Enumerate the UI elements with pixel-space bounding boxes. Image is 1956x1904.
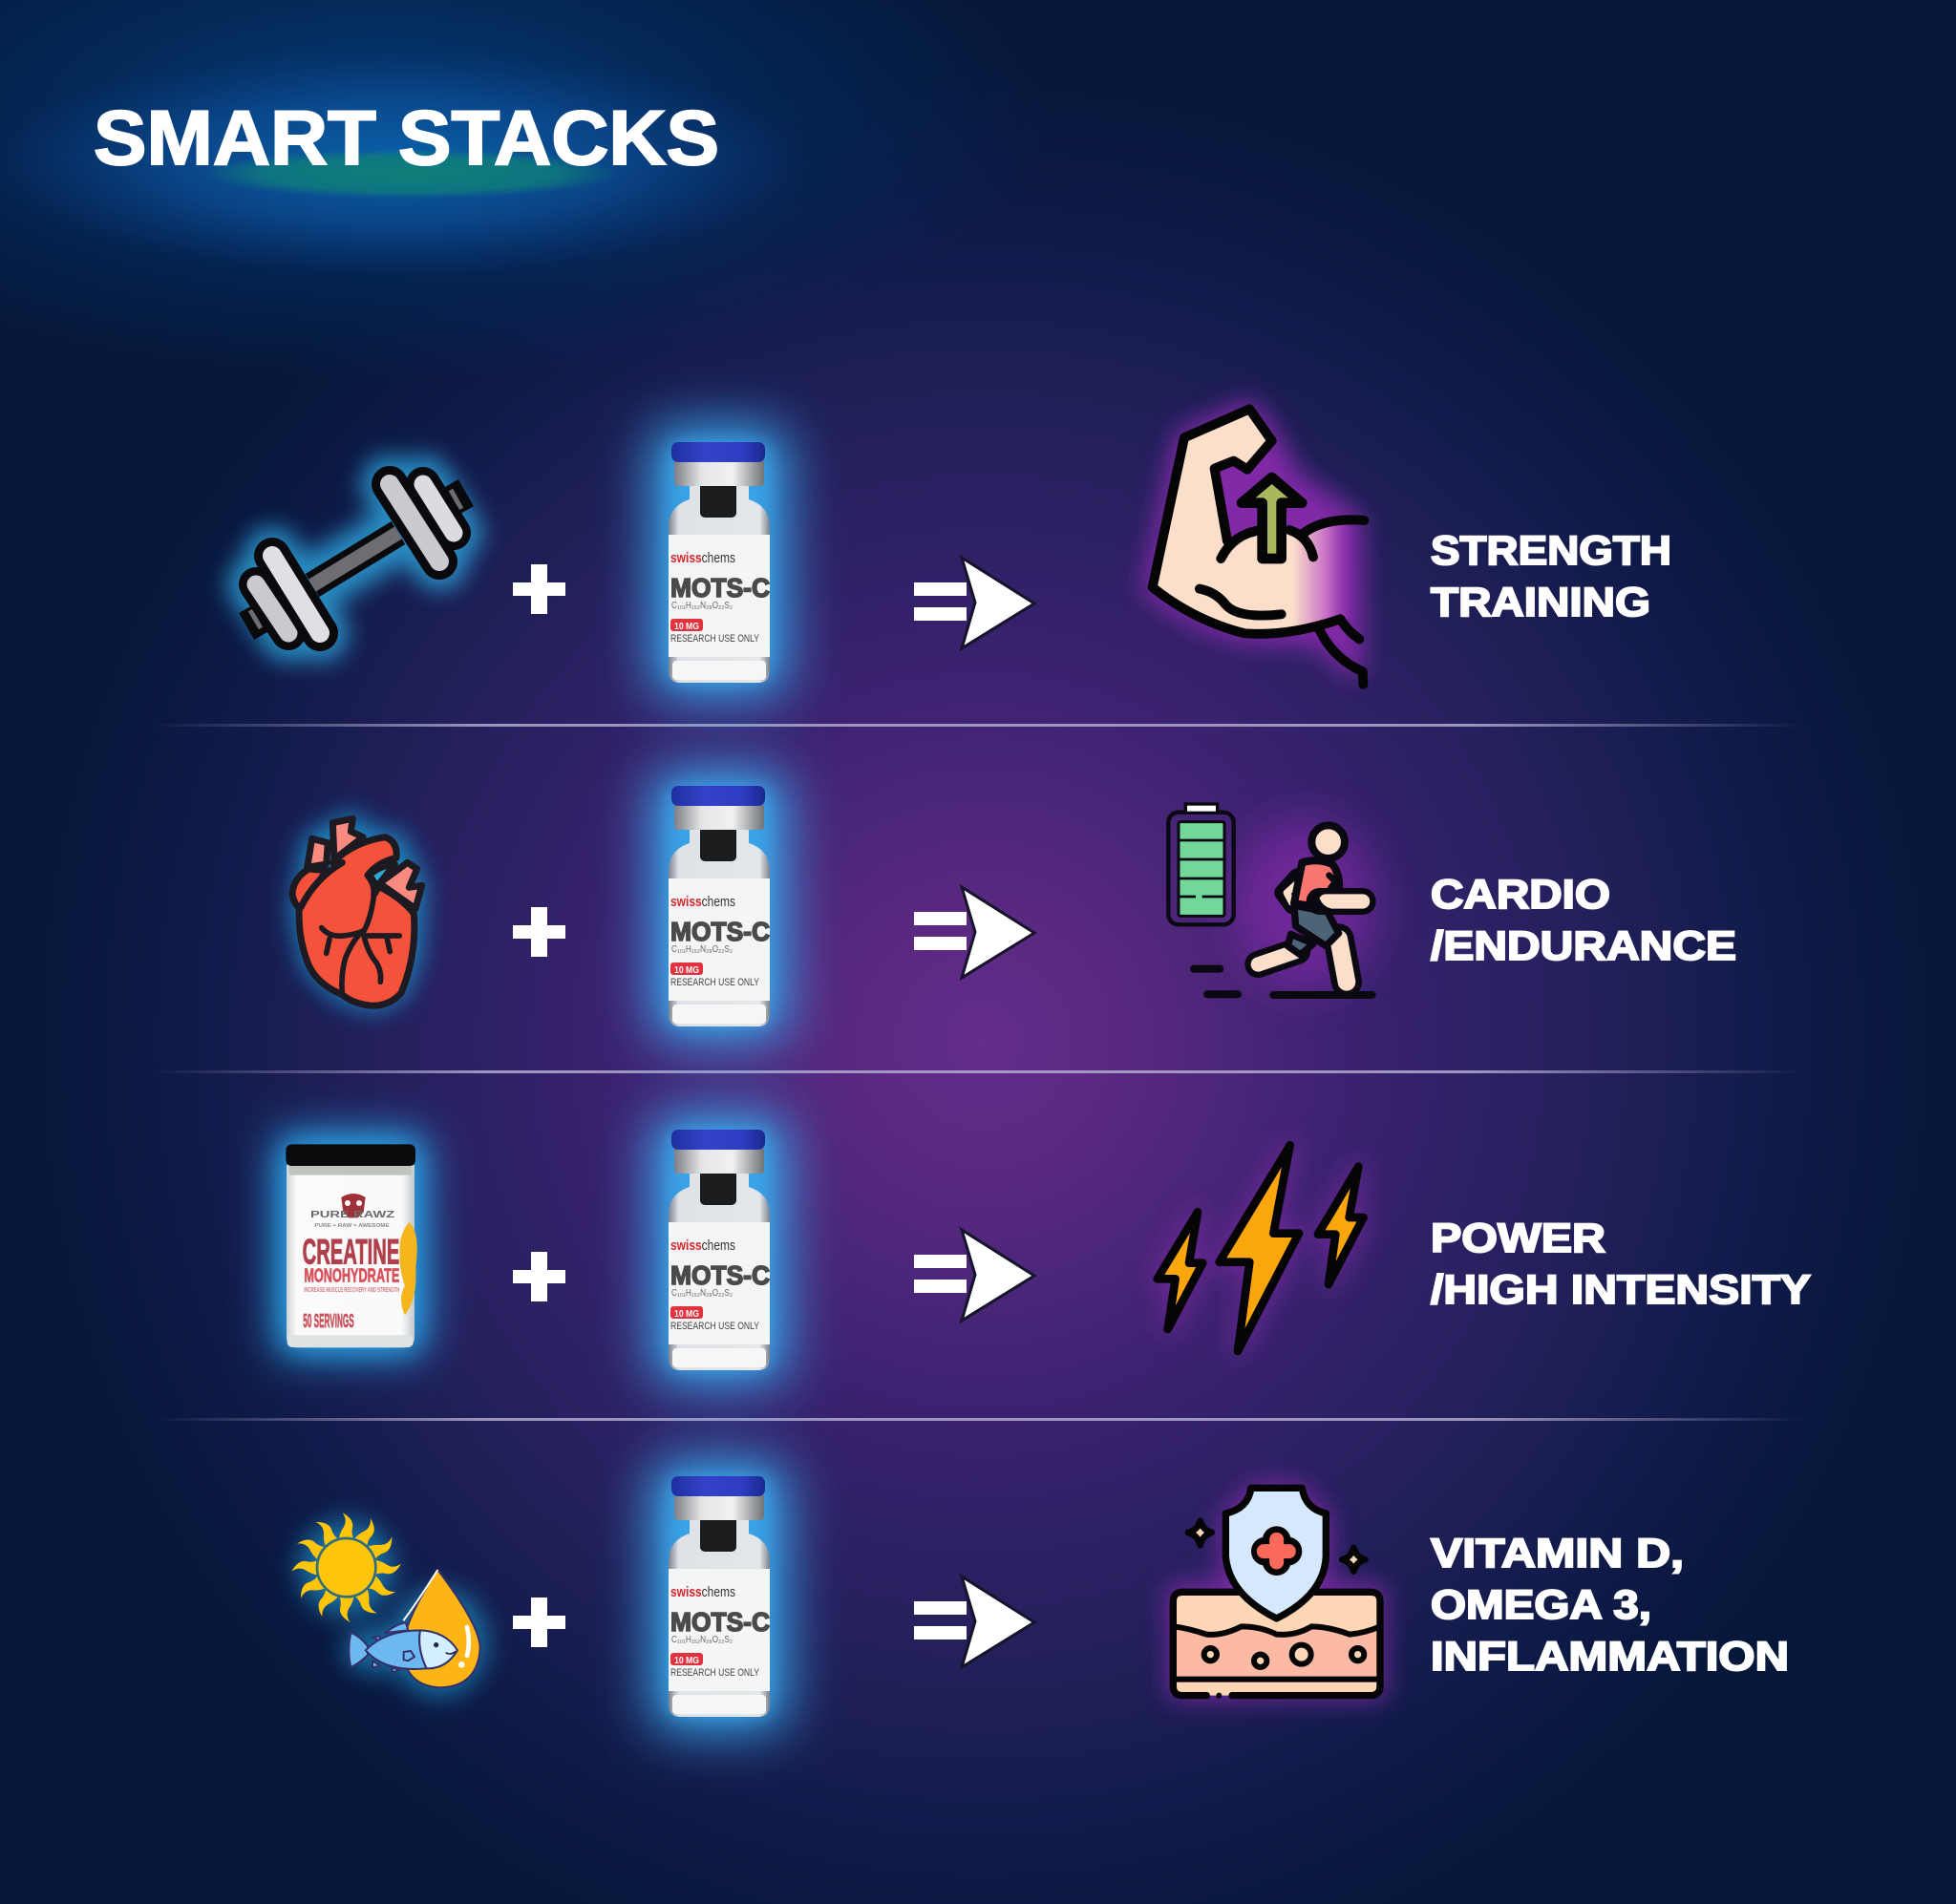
label: power high intensity: /HIGH INTENSITY (1431, 1267, 1811, 1313)
label: strength training: TRAINING (1431, 580, 1650, 625)
label: vitamin d, omega 3, inflammation (1431, 1531, 1789, 1680)
vial: MOTS-C: swisschems (670, 1584, 735, 1600)
vial: MOTS-C: swisschems (670, 894, 735, 910)
vial: MOTS-C: RESEARCH USE ONLY (670, 977, 760, 988)
equals arrow (914, 1230, 1034, 1321)
label: strength training: STRENGTH (1431, 528, 1671, 574)
vial: MOTS-C: MOTS-C (670, 573, 770, 603)
plus sign (513, 1252, 565, 1301)
vial: MOTS-C: MOTS-C (670, 1260, 770, 1290)
label: cardio endurance (1431, 872, 1736, 969)
vial: MOTS-C: swisschems (670, 1238, 735, 1254)
vial: MOTS-C (651, 1460, 787, 1731)
icon: battery and runner (1168, 804, 1375, 995)
plus sign (513, 564, 565, 614)
vial: MOTS-C: C₁₀₁H₁₅₂N₂₈O₂₂S₂ (671, 1288, 733, 1299)
label: power high intensity: POWER (1431, 1216, 1605, 1261)
vial: MOTS-C: C₁₀₁H₁₅₂N₂₈O₂₂S₂ (671, 944, 733, 955)
label: vitamin d, omega 3, inflammation: VITAMIN D, (1431, 1531, 1684, 1576)
vial: MOTS-C: 10 MG (674, 1655, 699, 1666)
label: cardio endurance: /ENDURANCE (1431, 923, 1736, 969)
icon: skin with shield (1173, 1488, 1380, 1699)
label: vitamin d, omega 3, inflammation: OMEGA 3, (1431, 1582, 1651, 1628)
label: strength training (1431, 528, 1671, 625)
label: power high intensity (1431, 1216, 1811, 1313)
icon: flexed arm (1153, 409, 1364, 685)
vial: MOTS-C (651, 1113, 787, 1385)
icon: sun, fish and oil drop (291, 1513, 487, 1697)
product: creatine jar: PURE + RAW = AWESOME (314, 1223, 390, 1229)
vial: MOTS-C: RESEARCH USE ONLY (670, 1667, 760, 1679)
vial: MOTS-C: MOTS-C (670, 917, 770, 946)
plus sign (513, 1597, 565, 1647)
row 4: vitamin d, omega 3, inflammation (291, 1460, 1789, 1731)
row 3: power high intensity (277, 1113, 1811, 1385)
divider lines (153, 724, 1805, 1421)
product: creatine jar: CREATINE (303, 1232, 399, 1271)
product: creatine jar: PURE RAWZ (310, 1210, 394, 1220)
product: creatine jar: 50 SERVINGS (303, 1310, 354, 1332)
product: creatine jar (277, 1134, 425, 1354)
label: cardio endurance: CARDIO (1431, 872, 1610, 918)
label: vitamin d, omega 3, inflammation: INFLAMMATION (1431, 1634, 1789, 1680)
vial: MOTS-C: C₁₀₁H₁₅₂N₂₈O₂₂S₂ (671, 601, 733, 611)
vial: MOTS-C: 10 MG (674, 621, 699, 632)
equals arrow (914, 887, 1034, 978)
vial: MOTS-C: RESEARCH USE ONLY (670, 1321, 760, 1332)
icon: heart (292, 816, 422, 1005)
vial: MOTS-C: MOTS-C (670, 1607, 770, 1637)
vial: MOTS-C: 10 MG (674, 1308, 699, 1320)
plus sign (513, 907, 565, 957)
vial: MOTS-C: swisschems (670, 550, 735, 566)
row 1: strength training (245, 409, 1671, 697)
title: SMART STACKS (94, 95, 719, 181)
equals arrow (914, 1576, 1034, 1667)
vial: MOTS-C (651, 770, 787, 1041)
icon: dumbbell (245, 483, 467, 636)
product: creatine jar: MONOHYDRATE (304, 1264, 399, 1286)
vial: MOTS-C: C₁₀₁H₁₅₂N₂₈O₂₂S₂ (671, 1635, 733, 1645)
vial: MOTS-C: RESEARCH USE ONLY (670, 633, 760, 645)
vial: MOTS-C (651, 426, 787, 697)
equals arrow (914, 558, 1034, 648)
vial: MOTS-C: 10 MG (674, 964, 699, 976)
icon: lightning bolts (1158, 1145, 1364, 1351)
product: creatine jar: INCREASE MUSCLE RECOVERY AND STRENGTH (304, 1285, 399, 1294)
row 2: cardio endurance (292, 770, 1736, 1041)
